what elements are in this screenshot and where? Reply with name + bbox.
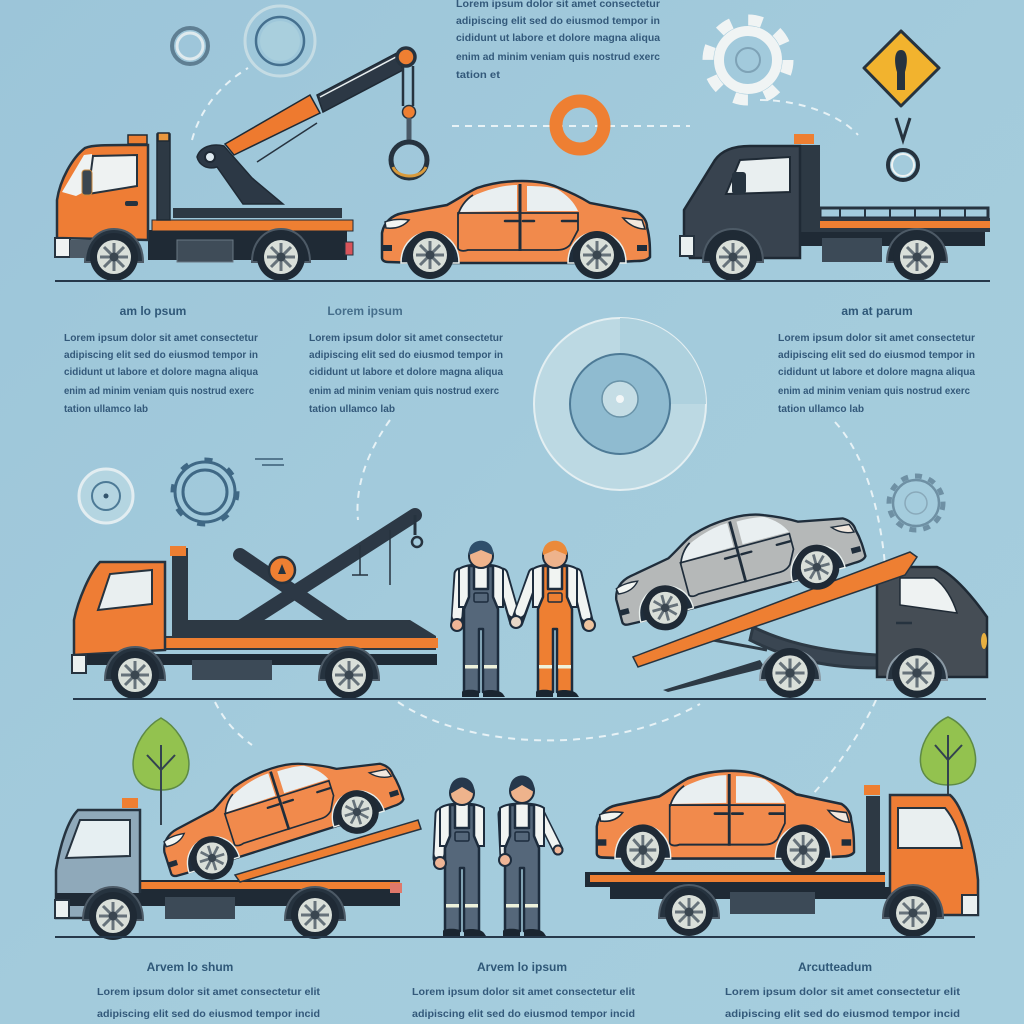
heading: bottom column 1: Arvem lo shum: [147, 960, 233, 974]
icon: orange ring: [556, 101, 604, 149]
text block: column 1: Lorem ipsum dolor sit amet consectetur: [64, 332, 258, 344]
truck: x-boom tow truck: [72, 515, 438, 699]
worker: right: [499, 776, 562, 936]
heading: column 3: am at parum: [841, 304, 913, 318]
top text block: tation et: [456, 69, 501, 81]
text block: bottom column 2: Lorem ipsum dolor sit amet consectetur elit: [412, 986, 636, 998]
text block: column 3: adipiscing elit sed do eiusmod tempor in: [778, 349, 975, 361]
truck: grey car on ramp: [604, 487, 987, 698]
orange car: [150, 733, 410, 892]
text block: column 1: cididunt ut labore et dolore magna aliqua: [64, 366, 258, 378]
grey car: [604, 487, 871, 641]
icon: large ring: [245, 6, 315, 76]
workers: holding hands: [451, 541, 595, 697]
text block: bottom column 1: [97, 986, 321, 1020]
text block: column 3: [778, 332, 975, 415]
icon: large central disc: [534, 318, 706, 490]
text block: column 1: [64, 332, 258, 415]
text block: column 3: Lorem ipsum dolor sit amet consectetur: [778, 332, 975, 344]
orange ramp: [235, 820, 421, 882]
icon: warning sign: [864, 31, 939, 106]
car on bed: [597, 771, 854, 876]
text block: column 1: tation ullamco lab: [64, 403, 148, 415]
text block: bottom column 1: adipiscing elit sed do eiusmod tempor incid: [97, 1008, 320, 1020]
boom: [197, 48, 427, 204]
x boom: [228, 515, 422, 635]
icon: gear right: [889, 476, 943, 530]
ground line: bottom row: [55, 936, 975, 938]
top text block: [456, 0, 660, 81]
small caption: [255, 458, 284, 466]
top text block: adipiscing elit sed do eiusmod tempor in: [456, 15, 660, 27]
workers: standing pair: [434, 776, 562, 936]
cab: [57, 145, 148, 240]
top text block: cididunt ut labore et dolore magna aliqua: [456, 32, 660, 44]
text block: bottom column 3: adipiscing elit sed do eiusmod tempor incid: [725, 1008, 960, 1020]
worker: grey overalls: [451, 541, 515, 697]
text block: column 1: adipiscing elit sed do eiusmod tempor in: [64, 349, 258, 361]
icon: gear: [708, 20, 788, 100]
truck: orange car loading: [55, 733, 421, 940]
text block: bottom column 1: Lorem ipsum dolor sit amet consectetur elit: [97, 986, 321, 998]
ground line: top row: [55, 280, 990, 282]
text block: column 2: adipiscing elit sed do eiusmod tempor in: [309, 349, 503, 361]
icon: gear left: [173, 460, 237, 524]
top text block: enim ad minim veniam quis nostrud exerc: [456, 51, 660, 63]
text block: bottom column 3: [725, 986, 961, 1020]
flatbed: [173, 208, 342, 218]
dashed connector arcs: [192, 68, 885, 795]
heading: column 2: Lorem ipsum: [327, 304, 403, 318]
text block: column 3: enim ad minim veniam quis nostrud exerc: [778, 385, 970, 397]
truck: dark flatbed: [680, 134, 990, 281]
heading: bottom column 2: Arvem lo ipsum: [477, 960, 567, 974]
orange ramp: [633, 552, 917, 667]
worker: orange overalls: [510, 541, 595, 697]
icon: hook: [888, 118, 918, 180]
tree: left: [133, 718, 189, 825]
icon: ring left: [79, 469, 133, 523]
text block: column 3: cididunt ut labore et dolore magna aliqua: [778, 366, 975, 378]
heading: column 1: am lo psum: [120, 304, 186, 318]
text block: column 2: cididunt ut labore et dolore magna aliqua: [309, 366, 503, 378]
text block: bottom column 2: [412, 986, 636, 1020]
tree: right: [920, 717, 976, 800]
text block: bottom column 2: adipiscing elit sed do eiusmod tempor incid: [412, 1008, 635, 1020]
text block: bottom column 3: Lorem ipsum dolor sit amet consectetur elit: [725, 986, 961, 998]
car: centre top: [382, 181, 650, 279]
heading: bottom column 3: Arcutteadum: [798, 960, 872, 974]
chassis: [177, 240, 233, 262]
text block: column 1: enim ad minim veniam quis nostrud exerc: [64, 385, 254, 397]
text block: column 2: enim ad minim veniam quis nostrud exerc: [309, 385, 499, 397]
text block: column 3: tation ullamco lab: [778, 403, 864, 415]
ground line: middle row: [73, 698, 986, 700]
truck: car loaded on flatbed: [585, 771, 978, 937]
worker: left: [434, 778, 486, 936]
icon: small ring: [172, 28, 208, 64]
truck: crane tow truck: [55, 48, 427, 281]
text block: column 2: [309, 332, 503, 415]
text block: column 2: tation ullamco lab: [309, 403, 395, 415]
text block: column 2: Lorem ipsum dolor sit amet consectetur: [309, 332, 503, 344]
